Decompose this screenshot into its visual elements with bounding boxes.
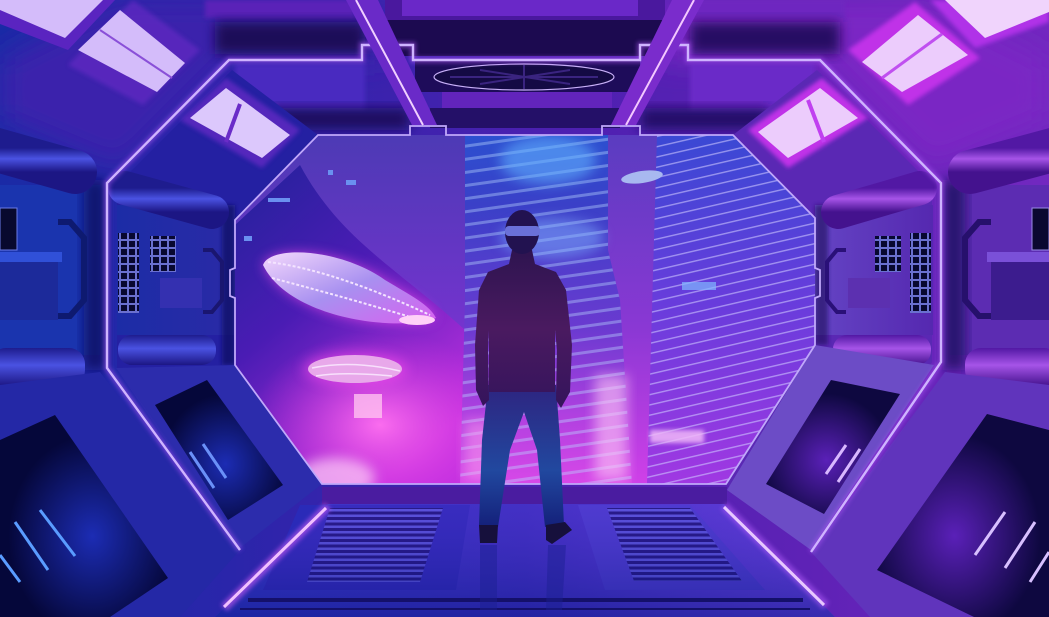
left floor hatch, large [0,415,168,617]
lower side panels [0,345,1049,617]
ceiling light, inner right [748,78,868,168]
shoes [479,522,572,544]
central tower [460,135,632,485]
small airship [303,352,407,386]
left curved building [235,165,465,490]
left floor neon strip [224,506,328,608]
right floor neon strip [724,506,826,606]
ceiling light, far right [930,0,1049,48]
ceiling light, upper right [848,2,980,105]
floor [215,504,835,617]
ceiling light, far left [0,0,115,50]
right floor hatch, large [877,414,1049,617]
head [505,210,539,254]
left wall panel [0,70,322,535]
person silhouette [475,210,572,610]
legs [479,385,564,527]
right diagonal ceiling beam [611,0,704,125]
left diagonal ceiling beam [346,0,437,125]
distant saucer [621,170,663,184]
ceiling [0,0,1049,170]
headset [505,226,540,236]
wall pipes left [0,148,216,386]
neon window frame [230,126,820,484]
left floor hatch, small [155,380,283,520]
gap column [608,135,657,484]
right floor hatch, small [766,380,900,514]
ceiling vent fan [434,64,614,90]
window view [235,135,815,484]
floor sill [322,487,727,504]
large airship [263,252,436,325]
outer neon frame [107,45,941,552]
right wall panel [726,70,1049,540]
reflection [480,545,566,610]
right striped building [647,135,815,484]
building window lights [244,170,356,241]
ceiling light, upper left [68,0,200,105]
ceiling light, inner left [180,78,300,168]
torso and arms [475,250,572,408]
wall pipes right [833,148,1049,386]
pink glow [264,338,463,483]
